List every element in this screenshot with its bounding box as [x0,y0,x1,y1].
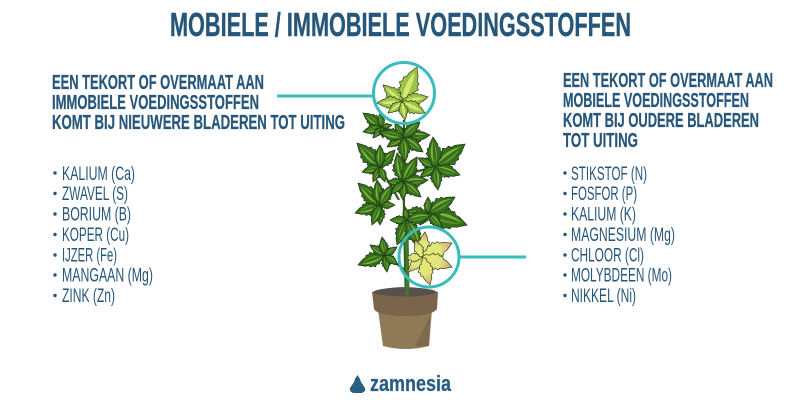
highlight circle and connector: old leaves [399,227,526,287]
leaf: middle left [351,137,400,184]
leaf: upper left [359,108,393,140]
icon: zamnesia mascot [350,375,365,393]
left list: immobile nutrients: MANGAAN (Mg) [62,266,153,286]
right list: mobile nutrients: STIKSTOF (N) [571,164,647,185]
left list: immobile nutrients: KOPER (Cu) [62,225,129,246]
right list: mobile nutrients: FOSFOR (P) [571,184,637,205]
left heading: immobile nutrients: IMMOBIELE VOEDINGSSTOFFEN [52,92,259,114]
leaf: lower centre [390,206,433,251]
left heading: immobile nutrients: KOMT BIJ NIEUWERE BLADEREN TOT UITING [52,112,345,134]
left list: immobile nutrients: BORIUM (B) [62,204,131,226]
right heading: mobile nutrients: TOT UITING [563,130,638,152]
leaf: upper centre [378,117,431,163]
left list: immobile nutrients: KALIUM (Ca) [62,164,135,185]
plant illustration [351,63,471,349]
right list: mobile nutrients: MOLYBDEEN (Mo) [571,266,672,286]
right heading: mobile nutrients [563,70,773,152]
leaf: middle right [416,136,471,191]
left heading: immobile nutrients [52,72,345,134]
plant stems [380,120,435,300]
flower pot [372,255,438,349]
left list: immobile nutrients: ZINK (Zn) [62,286,115,307]
leaf: lower right [403,190,470,236]
right list: mobile nutrients [563,164,675,307]
zamnesia logo [350,371,452,396]
right list: mobile nutrients: NIKKEL (Ni) [571,286,636,307]
leaf: bottom left [352,177,397,227]
right list: mobile nutrients: KALIUM (K) [571,204,636,226]
logo wordmark: zamnesia [370,371,452,396]
right list: mobile nutrients: MAGNESIUM (Mg) [571,225,675,246]
leaf: lowest left [355,236,401,273]
leaf: middle centre [387,151,429,202]
left list: immobile nutrients: ZWAVEL (S) [62,184,128,205]
highlight circle and connector: new leaves [277,62,434,124]
left heading: immobile nutrients: EEN TEKORT OF OVERMAAT AAN [52,72,264,94]
left list: immobile nutrients: IJZER (Fe) [62,246,117,266]
left list: immobile nutrients [53,164,153,307]
right list: mobile nutrients: CHLOOR (Cl) [571,246,644,266]
leaf: new growth with deficiency [377,63,429,121]
leaf: old growth with deficiency [404,231,456,287]
